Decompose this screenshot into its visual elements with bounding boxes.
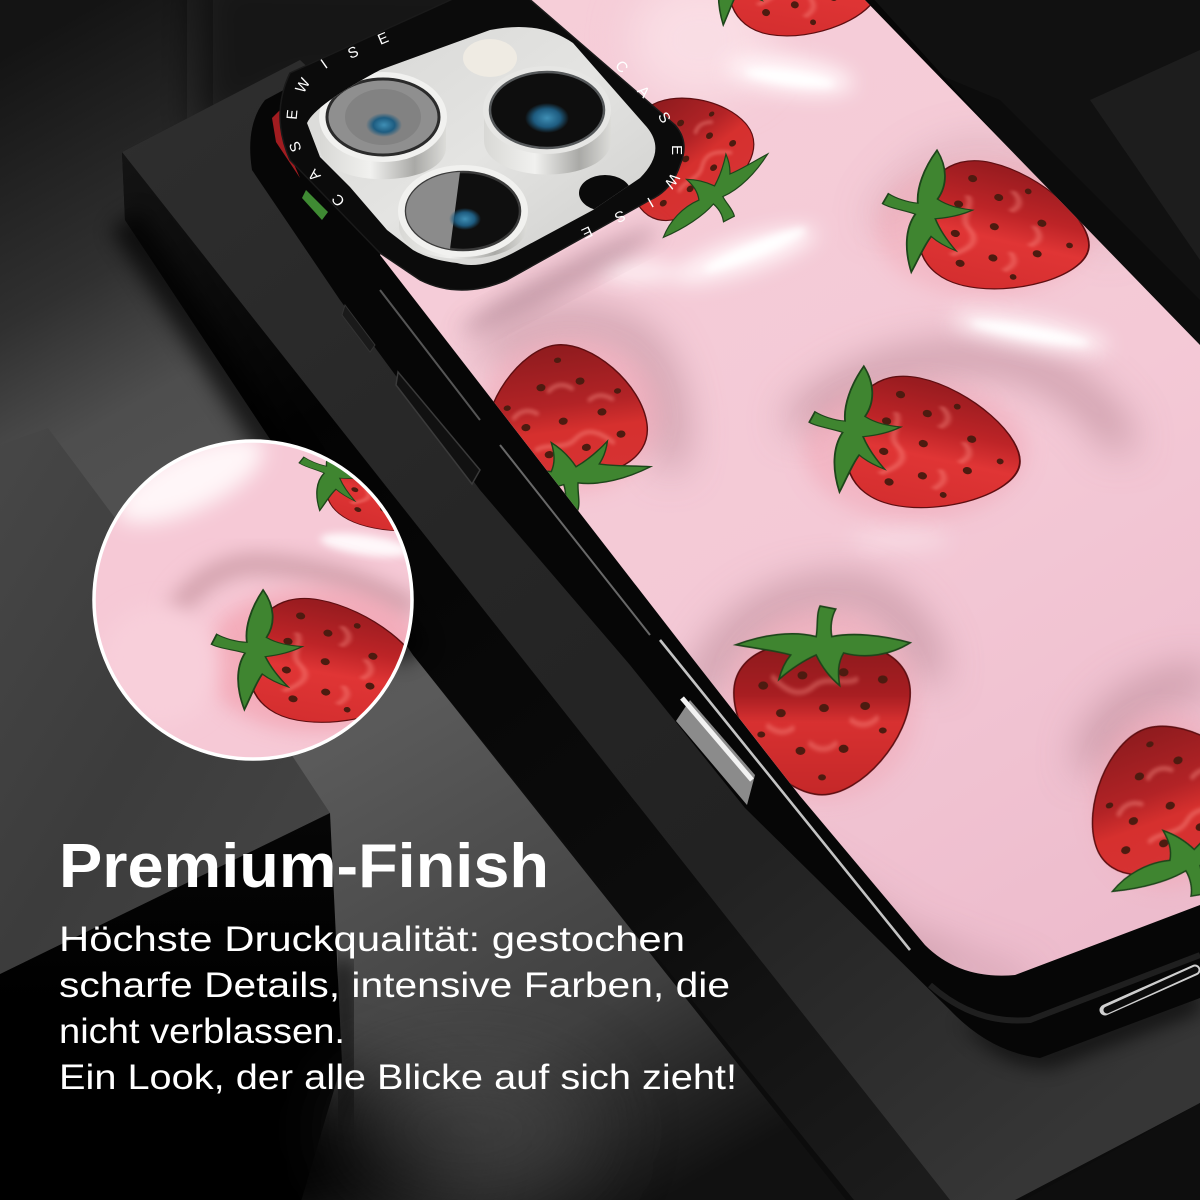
side button: volume long (396, 372, 480, 484)
silver side button (676, 700, 755, 805)
body text (59, 920, 737, 1097)
upper right dark block (1090, 50, 1200, 260)
lower right dark block (1015, 1103, 1200, 1200)
magnified strawberry upper (298, 456, 394, 531)
flash (463, 39, 517, 77)
lens top right (483, 66, 611, 174)
magnifier circle detail (92, 439, 414, 761)
lens top left (319, 72, 447, 179)
soft shading (490, 150, 1200, 985)
pink back panel with strawberries (380, 0, 1200, 976)
lens bottom (398, 165, 528, 259)
strawberry 6 (734, 606, 910, 795)
highlights (600, 48, 1111, 548)
heading: Premium-Finish (59, 832, 549, 901)
CASEWISE lettering: I (644, 193, 656, 210)
strawberry 2 (639, 98, 770, 238)
strawberry 4 (494, 344, 653, 511)
CASEWISE lettering: E (375, 29, 391, 49)
CASEWISE lettering: A (634, 83, 653, 101)
USB port (1105, 970, 1195, 1010)
module frame (280, 0, 684, 290)
camera module (272, 0, 685, 342)
CASEWISE lettering: C (611, 57, 631, 77)
CASEWISE lettering: E (668, 145, 685, 155)
body text: Ein Look, der alle Blicke auf sich zieht! (59, 1058, 737, 1097)
CASEWISE lettering: E (579, 222, 595, 242)
body text: Höchste Druckqualität: gestochen (59, 920, 685, 959)
CASEWISE lettering: S (345, 43, 361, 63)
CASEWISE lettering: E (284, 109, 301, 120)
CASEWISE lettering: S (654, 109, 674, 126)
CASEWISE lettering: C (328, 190, 349, 210)
CASEWISE lettering: W (292, 75, 314, 96)
CASEWISE lettering: S (286, 139, 305, 154)
CASEWISE lettering: I (318, 56, 331, 72)
strawberry 3 (882, 148, 1090, 290)
body text: scharfe Details, intensive Farben, die (59, 966, 730, 1005)
LiDAR sensor (579, 175, 631, 211)
strawberry 7 (1091, 725, 1200, 898)
strawberry 5 (796, 357, 1033, 529)
upper block side face (122, 152, 950, 1200)
left block front face (0, 813, 342, 1200)
magnified strawberry lower (210, 588, 404, 723)
CASEWISE lettering: A (305, 166, 324, 184)
CASEWISE lettering: W (660, 170, 683, 192)
camera glass (307, 27, 656, 265)
body text: nicht verblassen. (59, 1012, 345, 1051)
CASEWISE lettering: S (612, 206, 628, 226)
floor surface (0, 0, 854, 1200)
CASEWISE lettering (284, 29, 685, 242)
strawberry 1 (718, 0, 870, 36)
phone case body (250, 0, 1200, 1066)
side button: volume up (342, 305, 375, 352)
